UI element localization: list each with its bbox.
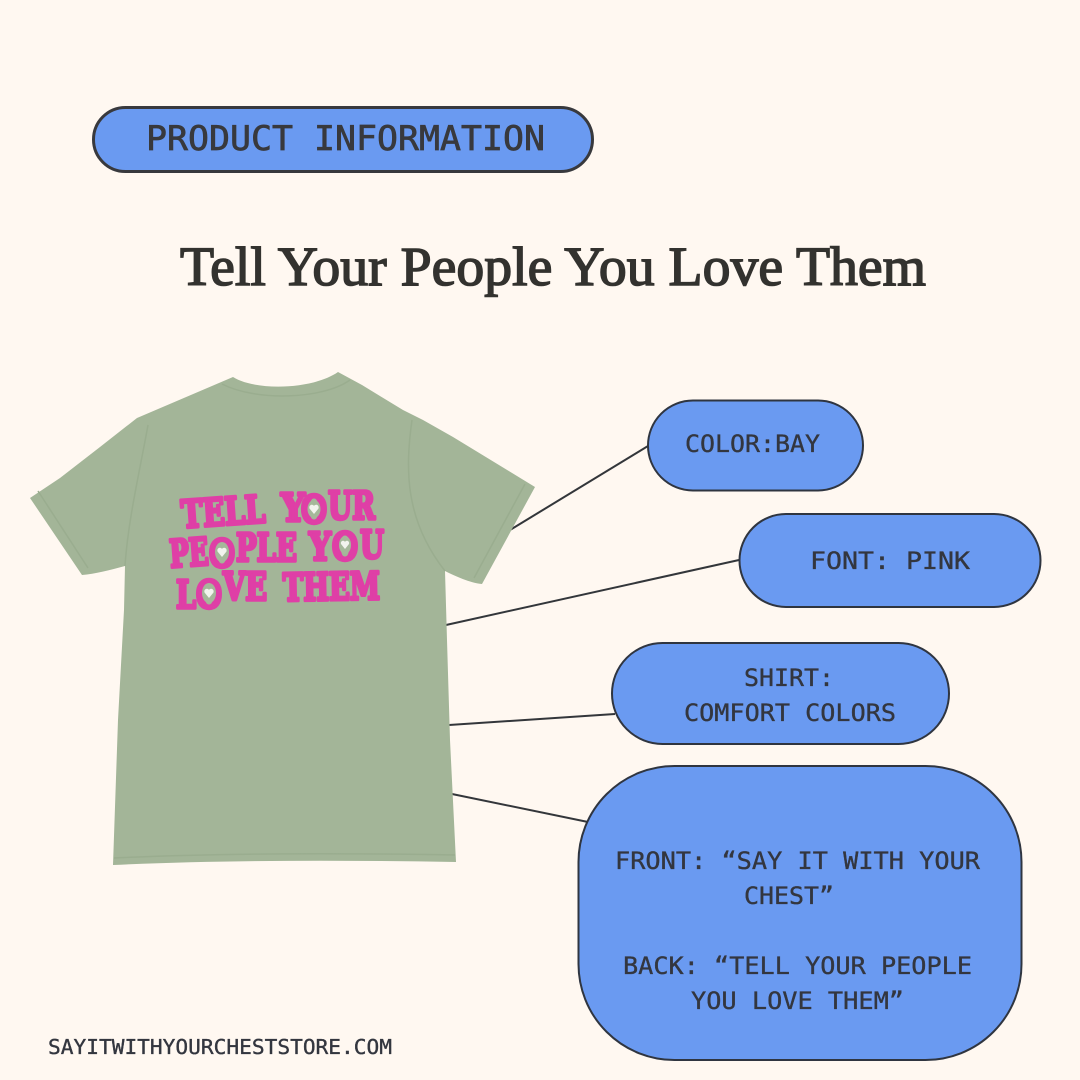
footer website: SAYITWITHYOURCHESTSTORE.COM	[48, 1035, 392, 1059]
callout: front and back print: BACK: “TELL YOUR PEOPLE	[623, 952, 972, 980]
callout: front and back print	[578, 766, 1022, 1060]
shirt print: tell your people you love them: Y	[308, 524, 332, 569]
callout: front and back print: FRONT: “SAY IT WITH YOUR	[615, 847, 981, 875]
shirt print: tell your people you love them: O	[301, 487, 327, 532]
shirt print: tell your people you love them: U	[360, 522, 384, 567]
collar and sleeve seams	[38, 380, 525, 858]
shirt print: tell your people you love them: THEM	[283, 563, 380, 610]
callout: shirt	[612, 643, 949, 744]
shirt print: tell your people you love them: O	[332, 524, 358, 569]
header pill: product information	[94, 108, 592, 172]
callout: shirt: SHIRT:	[744, 664, 834, 692]
connector lines	[446, 446, 739, 822]
shirt print: tell your people you love them: O	[209, 531, 235, 576]
header pill: product information: PRODUCT INFORMATION	[146, 119, 545, 159]
shirt print: tell your people you love them: L	[176, 572, 196, 617]
callout: font: FONT: PINK	[810, 547, 971, 575]
callout: font	[740, 514, 1040, 607]
callout: color	[648, 400, 863, 490]
shirt print: tell your people you love them: Y	[280, 485, 306, 530]
t-shirt illustration	[30, 372, 535, 865]
shirt print: tell your people you love them: PLE	[236, 525, 297, 570]
shirt print: tell your people you love them	[168, 483, 384, 617]
callout: color: COLOR:BAY	[685, 430, 821, 458]
heart counters in the letter O	[202, 500, 351, 603]
shirt print: tell your people you love them: TELL	[180, 486, 267, 537]
title: Tell Your People You Love Them	[180, 236, 926, 297]
shirt body	[30, 372, 535, 865]
shirt print: tell your people you love them: O	[196, 572, 222, 617]
callout: shirt: COMFORT COLORS	[684, 699, 896, 727]
callout: front and back print: CHEST”	[744, 882, 834, 910]
shirt print: tell your people you love them: PE	[168, 529, 210, 576]
callout: front and back print: YOU LOVE THEM”	[691, 987, 904, 1015]
shirt print: tell your people you love them: UR	[328, 483, 375, 528]
shirt print: tell your people you love them: VE	[222, 564, 267, 609]
